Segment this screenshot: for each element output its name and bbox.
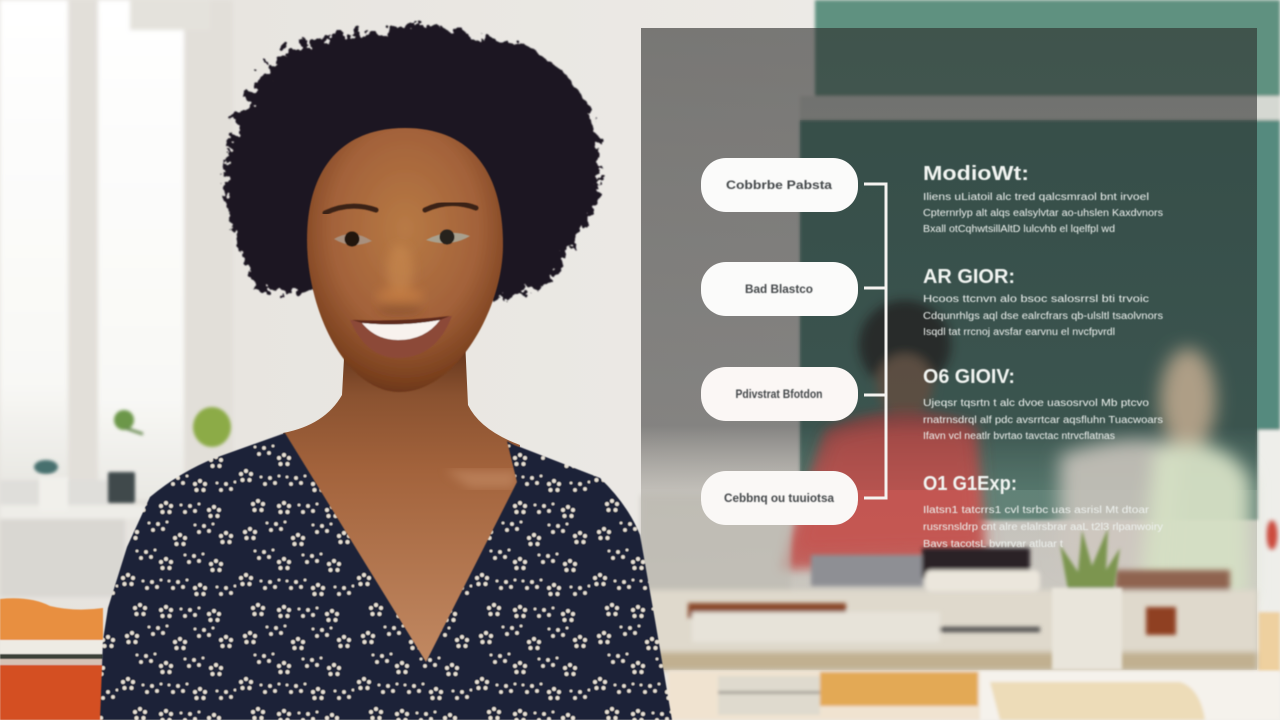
nose shading	[376, 244, 424, 314]
background: window	[0, 0, 233, 597]
pill: third item	[701, 367, 858, 421]
text block: second description: Isqdl tat rrcnoj avsfar earvnu el nvcfpvrdl	[923, 327, 1115, 338]
eyebrows	[325, 203, 476, 213]
pill: first item	[701, 158, 858, 212]
text block: second description	[923, 266, 1163, 338]
pill: first item: Cobbrbe Pabsta	[726, 180, 833, 192]
blurred student in pale top	[1060, 348, 1250, 600]
text block: third description: O6 GIOIV:	[923, 366, 1015, 388]
eyes	[334, 230, 470, 246]
scene through panel	[641, 348, 1257, 670]
text block: fourth description: Ilatsn1 tatcrrs1 cvl tsrbc uas asrisl Mt dtoar	[923, 505, 1150, 516]
text block: third description: rnatrnsdrql alf pdc avsrrtcar aqsfluhn Tuacwoars	[923, 415, 1163, 426]
pill: fourth item	[701, 471, 858, 525]
person	[100, 22, 672, 720]
text block: fourth description: Bavs tacotsL bvnrvar atluar t	[923, 539, 1063, 550]
text block: second description: Cdqunrhlgs aql dse ealrcfrars qb-ulsltl tsaolvnors	[923, 311, 1163, 322]
text block: first description: Cpternrlyp alt alqs ealsylvtar ao-uhslen Kaxdvnors	[923, 208, 1163, 219]
pill: second item: Bad Blastco	[745, 284, 813, 296]
foreground table and books	[668, 671, 1280, 720]
smile	[350, 316, 452, 358]
text block: second description: Hcoos ttcnvn alo bsoc salosrrsl bti trvoic	[923, 294, 1149, 305]
text block: first description: Bxall otCqhwtsillAltD lulcvhb el lqelfpl wd	[923, 224, 1115, 235]
text block: third description: Ujeqsr tqsrtn t alc dvoe uasosrvol Mb ptcvo	[923, 398, 1150, 409]
background: green boards	[800, 0, 1280, 720]
text block: third description: Ifavn vcl neatlr bvrtao tavctac ntrvcflatnas	[923, 431, 1115, 442]
neck and chest	[283, 340, 520, 668]
chest highlight	[445, 470, 518, 488]
hair	[224, 22, 600, 298]
connector bracket	[864, 184, 886, 498]
face	[307, 128, 503, 392]
pill: third item: Pdivstrat Bfotdon	[736, 389, 822, 401]
pill: second item	[701, 262, 858, 316]
text block: fourth description: O1 G1Exp:	[923, 473, 1017, 495]
table objects	[688, 548, 1176, 642]
text block: fourth description	[923, 473, 1163, 550]
pill: fourth item: Cebbnq ou tuuiotsa	[724, 493, 835, 505]
text block: first description	[923, 163, 1163, 235]
table surfaces	[641, 495, 1257, 670]
translucent panel	[641, 28, 1257, 670]
floral dress	[100, 433, 672, 720]
text block: second description: AR GIOR:	[923, 266, 1015, 288]
panel board shading	[800, 120, 1257, 490]
background: window plants	[34, 407, 231, 511]
text block: first description: ModioWt:	[923, 163, 1029, 185]
background: teacher under panel	[780, 300, 985, 570]
plant on table	[1052, 528, 1122, 670]
text block: fourth description: rusrsnsldrp cnt alre elalrsbrar aaL t2l3 rlpanwoiry	[923, 522, 1163, 533]
background: orange bench	[0, 598, 103, 720]
text block: third description	[923, 366, 1163, 442]
text block: first description: Iliens uLiatoil alc tred qalcsmraol bnt irvoel	[923, 192, 1149, 203]
red shirt brightening	[790, 421, 985, 555]
